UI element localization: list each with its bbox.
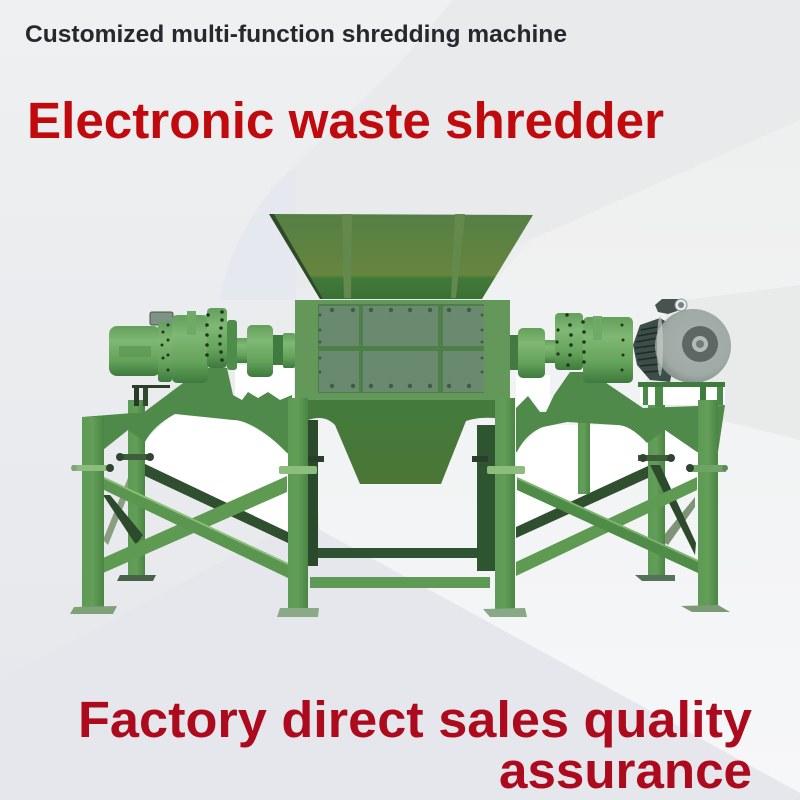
panel bolts bbox=[318, 308, 484, 388]
bottom tie bar bbox=[310, 577, 490, 588]
rear legs bbox=[103, 400, 696, 581]
arched side frames bbox=[82, 368, 725, 455]
right drive: coupling and gearbox bbox=[508, 313, 633, 383]
electric motor bbox=[633, 299, 731, 407]
bottom slogan: assurance bbox=[499, 742, 752, 799]
front cross braces bbox=[102, 476, 698, 578]
main title: Electronic waste shredder bbox=[27, 92, 664, 149]
white backdrop under arches bbox=[143, 365, 725, 536]
shredder body bbox=[295, 300, 510, 400]
bottom slogan bbox=[78, 691, 753, 799]
subtitle: Customized multi-function shredding machine bbox=[25, 21, 567, 48]
discharge chute bbox=[308, 400, 505, 484]
rear dark braces bbox=[103, 420, 695, 571]
hopper bbox=[269, 214, 533, 299]
shredder machine bbox=[70, 214, 731, 617]
bottom slogan: Factory direct sales quality bbox=[78, 691, 753, 748]
leg clamps bbox=[71, 453, 728, 474]
front legs and feet bbox=[70, 398, 730, 617]
access panels bbox=[319, 306, 484, 392]
left drive: gearbox and coupling bbox=[109, 308, 295, 406]
